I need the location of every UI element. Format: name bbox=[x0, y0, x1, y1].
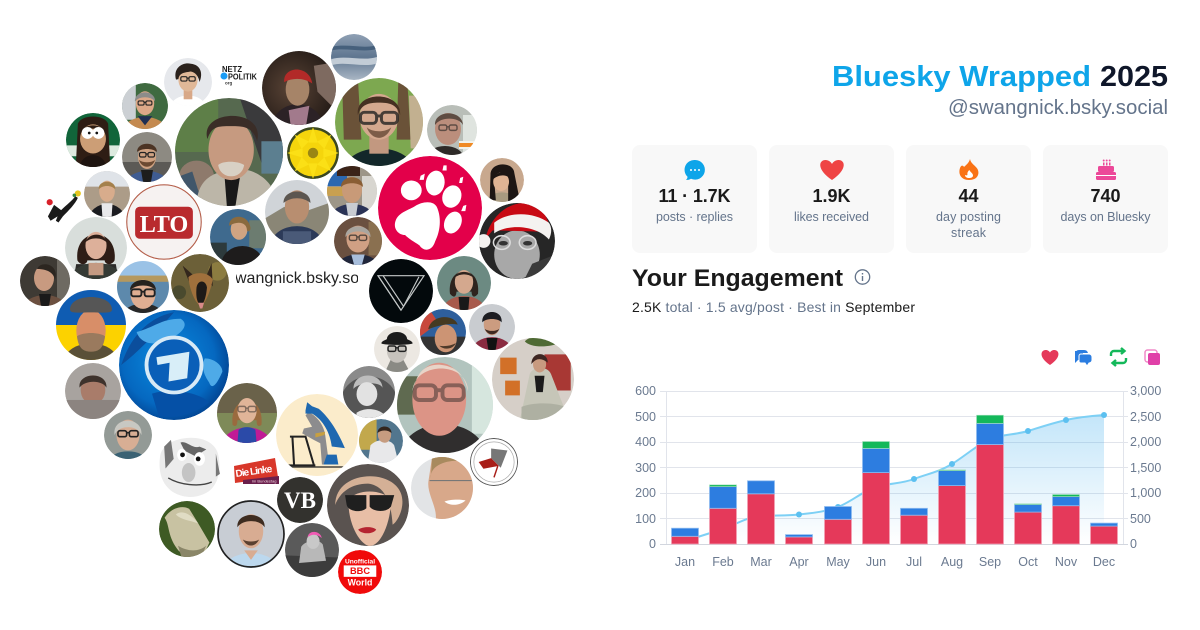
replies bars bbox=[672, 423, 1118, 537]
label: days on Bluesky bbox=[1060, 210, 1151, 224]
panel: likes received bbox=[769, 145, 894, 253]
right axis labels bbox=[1130, 384, 1161, 551]
avatar: woman in magenta jacket bbox=[217, 383, 277, 443]
avatar: man with glasses in forest bbox=[335, 78, 423, 166]
avatar: Netzpolitik logo bbox=[220, 65, 257, 86]
avatar: man in FAU hoodie bbox=[265, 180, 329, 244]
chart legend bbox=[1042, 348, 1160, 366]
avatar: illustrated man in bowler hat bbox=[374, 326, 420, 372]
avatar: man in profile bbox=[20, 256, 70, 306]
left axis labels: 300 bbox=[635, 461, 656, 475]
avatar: illustrated man with Ukraine flag bbox=[56, 290, 126, 360]
avatar: flower thrower stencil bbox=[47, 190, 81, 222]
heading: Your Engagement: Your Engagement bbox=[632, 265, 843, 292]
avatar: sunflower bbox=[287, 127, 339, 179]
avatar: big smiling man bbox=[175, 98, 283, 206]
avatar: Die Linke logo: Die Linke bbox=[235, 464, 273, 480]
avatar: muppet sketch bbox=[160, 438, 220, 497]
avatar: LTO logo: LTO bbox=[140, 211, 188, 238]
right axis labels: 500 bbox=[1130, 512, 1151, 526]
icon: likes heart bbox=[1042, 350, 1058, 365]
avatar: Unofficial BBC World: Unofficial bbox=[345, 559, 375, 566]
chart gridlines and axes bbox=[660, 391, 1128, 544]
value: 1.9K bbox=[812, 186, 851, 206]
icon: flame bbox=[959, 159, 978, 180]
avatar: Unofficial BBC World: World bbox=[348, 578, 372, 588]
cumulative area bbox=[685, 415, 1104, 544]
avatar: woman sitting in office bbox=[492, 335, 574, 420]
right axis labels: 2,500 bbox=[1130, 410, 1161, 424]
right axis labels: 0 bbox=[1130, 537, 1137, 551]
avatar: red beanie man bbox=[262, 51, 336, 125]
month labels: Jun bbox=[866, 555, 886, 569]
month labels: Sep bbox=[979, 555, 1001, 569]
avatar: VB monogram bbox=[277, 477, 323, 523]
left axis labels: 200 bbox=[635, 486, 656, 500]
avatar: man with rimless glasses bbox=[411, 457, 473, 519]
month labels bbox=[675, 555, 1115, 569]
right axis labels: 1,500 bbox=[1130, 461, 1161, 475]
avatar: Batman with walker bbox=[276, 394, 358, 476]
avatar cluster bbox=[20, 34, 574, 594]
label: likes received bbox=[794, 210, 869, 224]
label: posts · replies bbox=[656, 210, 733, 224]
avatar: red paw logo bbox=[378, 156, 482, 260]
avatar: grey-haired man with glasses bbox=[104, 411, 152, 459]
stacked bar chart with cumulative line bbox=[635, 384, 1161, 569]
left axis labels: 400 bbox=[635, 435, 656, 449]
right axis labels: 3,000 bbox=[1130, 384, 1161, 398]
avatar: young man in black jacket bbox=[84, 171, 130, 217]
avatar: curly-haired man bbox=[164, 58, 212, 101]
left axis labels: 500 bbox=[635, 410, 656, 424]
avatar: German shepherd dog bbox=[171, 254, 229, 312]
avatar: man in suit bbox=[327, 166, 377, 216]
avatar: Die Linke logo bbox=[234, 458, 279, 484]
month labels: Dec bbox=[1093, 555, 1115, 569]
icon: repost arrows bbox=[1111, 348, 1126, 366]
label: day posting bbox=[936, 210, 1001, 224]
avatar: grey sky bbox=[331, 34, 377, 80]
left axis labels: 0 bbox=[649, 537, 656, 551]
avatar: Die Linke logo: im Bundestag bbox=[252, 478, 276, 484]
value: 44 bbox=[958, 186, 979, 206]
avatar: older man with glasses bbox=[427, 105, 477, 155]
month labels: Mar bbox=[750, 555, 772, 569]
line points bbox=[796, 412, 1107, 518]
avatar: large older man with glasses bbox=[397, 357, 493, 486]
likes bars bbox=[672, 444, 1118, 544]
panel: days on Bluesky bbox=[1043, 145, 1168, 253]
avatar: man with black outline ring bbox=[217, 500, 285, 568]
left axis labels bbox=[635, 384, 656, 551]
left axis labels: 600 bbox=[635, 384, 656, 398]
avatar: Tagesschau globe bbox=[119, 310, 229, 420]
avatar: young bearded man in red hoodie bbox=[469, 304, 515, 367]
cumulative line bbox=[685, 415, 1104, 541]
clipped handle text: swangnick.bsky.social bbox=[227, 270, 383, 287]
month labels: Nov bbox=[1055, 555, 1078, 569]
avatar: VB monogram: VB bbox=[284, 488, 316, 513]
avatar: woman in Santa hat bbox=[477, 203, 555, 279]
panel: posts and replies bbox=[632, 145, 757, 253]
month labels: Apr bbox=[789, 555, 809, 569]
avatar: man with grey hair and glasses bbox=[334, 217, 382, 265]
month labels: Feb bbox=[712, 555, 734, 569]
icon: info bbox=[855, 270, 870, 284]
avatar: South Park cartoon bbox=[66, 113, 120, 167]
value: 740 bbox=[1090, 186, 1121, 206]
icon: cake bbox=[1096, 160, 1116, 180]
month labels: Jan bbox=[675, 555, 695, 569]
avatar: man with obscured face bbox=[65, 363, 121, 419]
icon: speech bubble bbox=[685, 160, 705, 180]
stat cards bbox=[632, 145, 1168, 253]
avatar: Netzpolitik logo: POLITIK bbox=[228, 72, 257, 82]
avatar: stone statue bbox=[159, 501, 215, 557]
icon: heart bbox=[820, 160, 844, 180]
panel: posting streak bbox=[906, 145, 1031, 253]
month labels: May bbox=[826, 555, 851, 569]
avatar: woman in sunglasses bbox=[327, 464, 409, 546]
avatar: black and white with pink hat bbox=[285, 523, 339, 577]
month labels: Jul bbox=[906, 555, 922, 569]
avatar: woman in black top bbox=[210, 209, 266, 265]
right axis labels: 1,000 bbox=[1130, 486, 1161, 500]
avatar: Unofficial BBC World: BBC bbox=[350, 566, 370, 576]
value: 11 · 1.7K bbox=[658, 186, 730, 206]
title: Bluesky Wrapped: Bluesky Wrapped bbox=[832, 61, 1091, 93]
left axis labels: 100 bbox=[635, 512, 656, 526]
icon: replies bubbles bbox=[1075, 350, 1092, 366]
panel: posting streak: streak bbox=[951, 226, 987, 240]
month labels: Aug bbox=[941, 555, 963, 569]
avatar: woman in red jacket bbox=[437, 256, 491, 310]
handle: @swangnick.bsky.social bbox=[948, 97, 1168, 119]
header bbox=[832, 61, 1168, 119]
avatar: black and white woman sketch bbox=[343, 366, 395, 418]
avatar: Unofficial BBC World bbox=[338, 550, 382, 594]
avatar: man in orange sweater bbox=[122, 83, 168, 129]
avatar: smiling man in green hat bbox=[420, 309, 466, 355]
avatar: woman with dark curly hair bbox=[65, 217, 127, 279]
avatar: inverted triangle logo bbox=[369, 259, 433, 323]
right axis labels: 2,000 bbox=[1130, 435, 1161, 449]
avatar: Netzpolitik logo: org bbox=[225, 80, 232, 86]
avatar: woman with dark hair bbox=[480, 158, 524, 202]
avatar: man at the lake bbox=[117, 261, 169, 313]
avatar: Netzpolitik logo: NETZ bbox=[222, 65, 242, 74]
title: year: 2025 bbox=[1100, 61, 1168, 93]
engagement summary: 2.5K total · 1.5 avg/post · Best in September bbox=[632, 299, 915, 315]
avatar: man at desk bbox=[359, 419, 403, 463]
month labels: Oct bbox=[1018, 555, 1038, 569]
reposts bars bbox=[710, 415, 1080, 504]
avatar: bearded man with glasses bbox=[122, 132, 172, 182]
icon: quote squares bbox=[1145, 350, 1160, 365]
avatar: flag emblem bbox=[470, 438, 518, 486]
avatar: LTO logo bbox=[127, 185, 201, 259]
